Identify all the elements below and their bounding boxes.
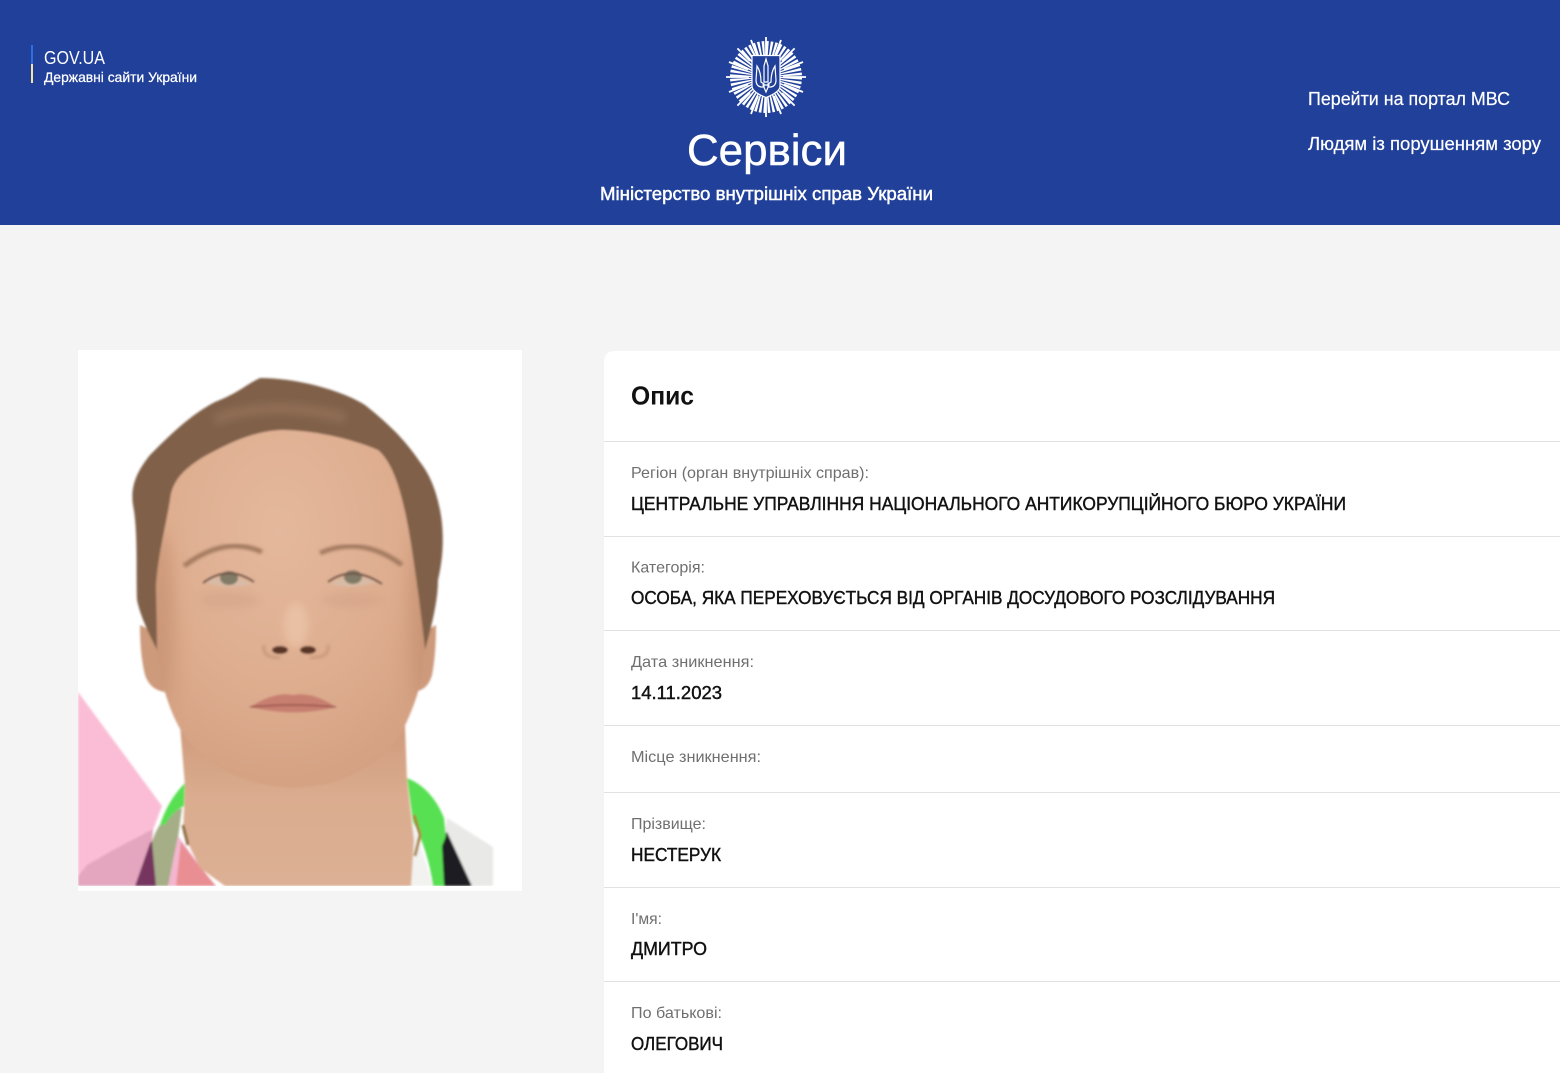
header bar	[0, 0, 1560, 225]
photo panel: portrait	[78, 350, 522, 891]
field: region: ЦЕНТРАЛЬНЕ УПРАВЛІННЯ НАЦІОНАЛЬНОГО АНТИКОРУПЦІЙНОГО БЮРО УКРАЇНИ	[631, 493, 1346, 514]
field: patronymic	[631, 1005, 723, 1054]
field: first name: І'мя:	[631, 911, 662, 928]
field: first name	[631, 911, 707, 959]
field: date of disappearance: Дата зникнення:	[631, 654, 754, 671]
field: region: Регіон (орган внутрішніх справ):	[631, 465, 869, 482]
field: category: ОСОБА, ЯКА ПЕРЕХОВУЄТЬСЯ ВІД ОРГАНІВ ДОСУДОВОГО РОЗСЛІДУВАННЯ	[631, 588, 1275, 608]
field: surname	[631, 816, 721, 865]
GOV.UA logo block: Державні сайти України	[44, 69, 197, 85]
panel: description card	[604, 351, 1560, 1073]
field: patronymic: По батькові:	[631, 1005, 722, 1022]
field: category	[631, 560, 1275, 608]
field: place of disappearance: Місце зникнення:	[631, 749, 761, 766]
GOV.UA logo block: GOV.UA	[44, 48, 105, 68]
field: surname: НЕСТЕРУК	[631, 845, 721, 865]
field: surname: Прізвище:	[631, 816, 706, 833]
field: first name: ДМИТРО	[631, 939, 707, 959]
field: region	[631, 465, 1346, 514]
icon: ministry star emblem	[726, 37, 806, 117]
field: date of disappearance	[631, 654, 754, 703]
title: Сервіси: Сервіси	[687, 126, 847, 175]
navigation link: accessibility: Людям із порушенням зору	[1308, 134, 1541, 154]
field: category: Категорія:	[631, 560, 705, 576]
field: date of disappearance: 14.11.2023	[631, 683, 722, 703]
field: patronymic: ОЛЕГОВИЧ	[631, 1034, 723, 1054]
navigation link: portal: Перейти на портал МВС	[1308, 89, 1510, 109]
GOV.UA logo block	[31, 45, 197, 85]
subtitle: ministry name: Міністерство внутрішніх справ України	[600, 184, 933, 204]
heading: Опис: Опис	[631, 380, 694, 410]
